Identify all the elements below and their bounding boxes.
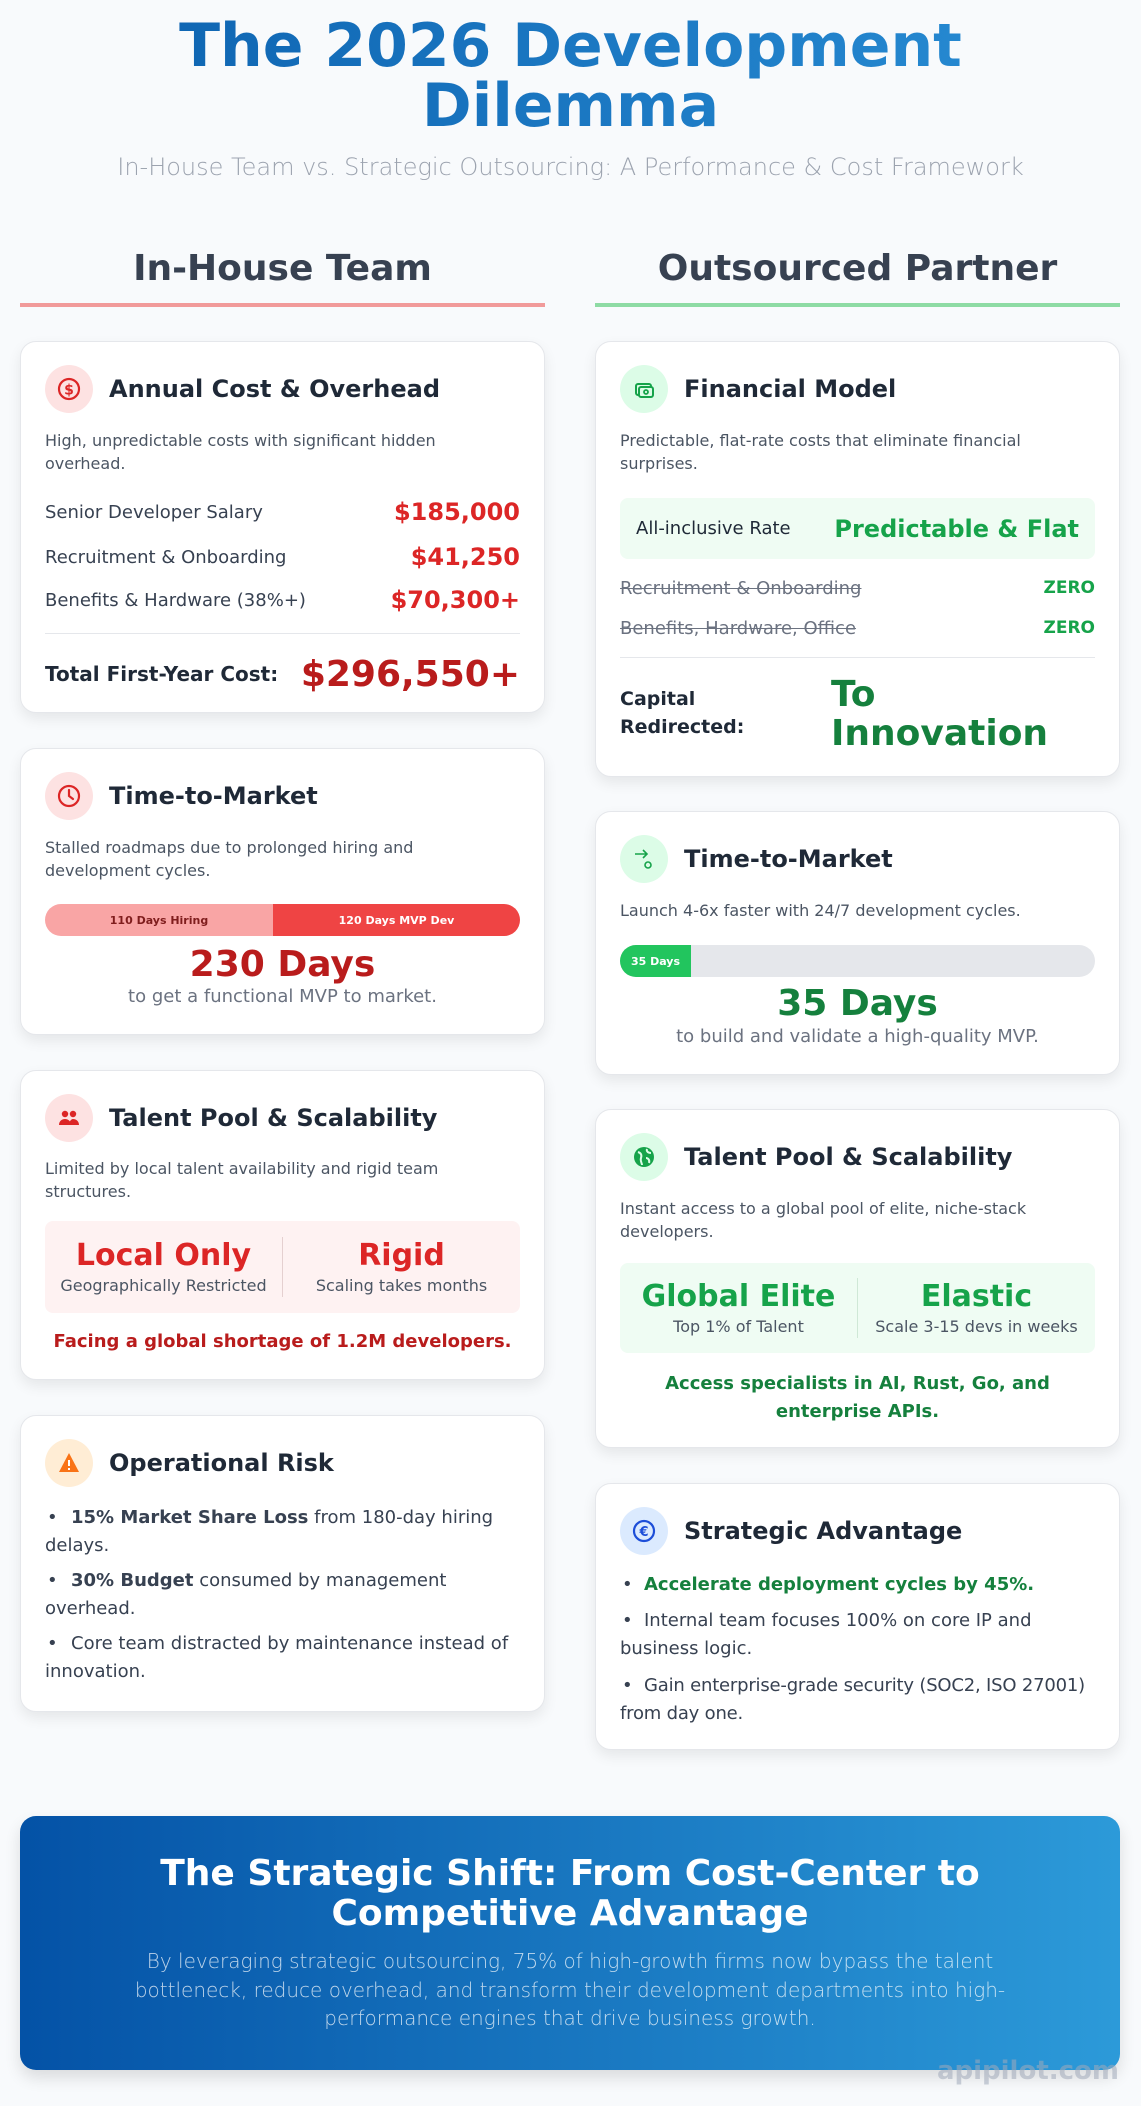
bullet list: 30% Budget consumed by management overhead. <box>45 1570 446 1619</box>
capital label: Redirected: <box>620 716 744 738</box>
bullet list: 15% Market Share Loss from 180-day hiring delays. <box>45 1507 493 1556</box>
stat box: Scaling takes months <box>316 1276 487 1295</box>
bullet list: Internal team focuses 100% on core IP and business logic. <box>620 1610 1032 1659</box>
callout: Access specialists in AI, Rust, Go, and enterprise APIs. <box>665 1373 1050 1422</box>
cost row benefits <box>45 586 520 614</box>
heading: Time-to-Market <box>684 845 893 873</box>
progress bar: 35 Days <box>631 954 680 968</box>
panel: in-house talent <box>20 1070 545 1380</box>
capital value: To <box>831 674 876 715</box>
cost row recruitment: $41,250 <box>411 543 520 571</box>
cost row recruitment <box>45 543 520 571</box>
rate box: All-inclusive Rate <box>636 518 791 539</box>
description: Launch 4-6x faster with 24/7 development cycles. <box>620 901 1021 920</box>
stacked bar <box>45 904 520 936</box>
bullet list: • <box>622 1675 632 1696</box>
bullet list: • <box>47 1633 58 1654</box>
big number: 230 Days <box>190 944 375 985</box>
title: Dilemma <box>422 71 719 141</box>
stacked bar: 110 Days Hiring <box>110 914 208 926</box>
zero row benefits: ZERO <box>1044 618 1095 638</box>
stat box <box>620 1263 1095 1353</box>
cost row benefits: Benefits & Hardware (38%+) <box>45 590 306 610</box>
cost row salary <box>45 498 520 526</box>
bullet list: • <box>47 1507 58 1528</box>
icon: warning <box>45 1439 93 1487</box>
big number: 35 Days <box>777 983 938 1024</box>
panel: outsourced talent <box>595 1109 1120 1448</box>
column header: outsourced: Outsourced Partner <box>658 248 1057 289</box>
description: Instant access to a global pool of elite, niche-stack developers. <box>620 1199 1026 1241</box>
stat box <box>45 1221 520 1313</box>
rate box <box>620 498 1095 559</box>
progress bar <box>620 945 1095 977</box>
description: Predictable, flat-rate costs that eliminate financial surprises. <box>620 431 1021 473</box>
panel: outsourced time to market <box>595 811 1120 1075</box>
stat box: Global Elite <box>642 1279 835 1314</box>
subtitle: In-House Team vs. Strategic Outsourcing: A Performance & Cost Framework <box>117 153 1024 181</box>
stat box: Geographically Restricted <box>60 1276 267 1295</box>
icon: euro <box>620 1507 668 1555</box>
bullet list: • <box>47 1570 58 1591</box>
callout: Facing a global shortage of 1.2M developers. <box>54 1331 512 1352</box>
stat box: Local Only <box>76 1238 251 1273</box>
icon: dollar: $ <box>64 382 74 398</box>
icon: people <box>45 1094 93 1142</box>
capital label: Capital <box>620 688 695 710</box>
heading: Talent Pool & Scalability <box>109 1104 437 1132</box>
panel: operational risk <box>20 1415 545 1712</box>
icon: globe <box>620 1133 668 1181</box>
bullet list: Gain enterprise-grade security (SOC2, ISO 27001) from day one. <box>620 1675 1085 1724</box>
icon: money <box>620 365 668 413</box>
column header: in-house <box>20 245 545 307</box>
bullet list: Accelerate deployment cycles by 45%. <box>644 1574 1034 1595</box>
title: The 2026 Development <box>179 11 962 81</box>
title <box>0 16 1141 136</box>
cost row benefits: $70,300+ <box>391 586 520 614</box>
stat box: Top 1% of Talent <box>673 1317 804 1336</box>
capital value: Innovation <box>831 713 1048 754</box>
rate box: Predictable & Flat <box>834 514 1079 542</box>
zero row recruitment <box>620 578 1095 598</box>
description: Limited by local talent availability and rigid team structures. <box>45 1159 438 1201</box>
capital value <box>831 674 1048 754</box>
cost row salary: $185,000 <box>394 498 520 526</box>
icon: arrow <box>620 835 668 883</box>
column header: outsourced <box>595 245 1120 307</box>
panel: annual cost <box>20 341 545 713</box>
heading: Financial Model <box>684 375 896 403</box>
icon: clock <box>45 772 93 820</box>
bullet list: • <box>622 1574 633 1595</box>
total cost <box>45 654 520 694</box>
banner text: By leveraging strategic outsourcing, 75% of high-growth firms now bypass the talent bottleneck, reduce overhead, and transform their development departments into high-performance engines that drive business growth. <box>135 1949 1005 2030</box>
panel: financial model <box>595 341 1120 777</box>
bullet list <box>45 1507 509 1682</box>
icon: dollar <box>45 365 93 413</box>
total cost: Total First-Year Cost: <box>45 662 278 686</box>
cost row salary: Senior Developer Salary <box>45 502 263 522</box>
banner heading: The Strategic Shift: From Cost-Center to Competitive Advantage <box>160 1853 980 1934</box>
description: High, unpredictable costs with significant hidden overhead. <box>45 431 436 473</box>
sub text: to get a functional MVP to market. <box>128 986 437 1007</box>
zero row benefits <box>620 618 1095 638</box>
watermark: apipilot.com <box>937 2056 1119 2086</box>
stat box: Rigid <box>358 1238 445 1273</box>
capital label <box>620 688 744 738</box>
zero row recruitment: ZERO <box>1044 578 1095 598</box>
stacked bar: 120 Days MVP Dev <box>339 914 454 926</box>
sub text: to build and validate a high-quality MVP. <box>676 1026 1039 1047</box>
panel: strategic advantage <box>595 1483 1120 1750</box>
zero row benefits: Benefits, Hardware, Office <box>620 618 856 638</box>
heading: Time-to-Market <box>109 782 318 810</box>
heading: Annual Cost & Overhead <box>109 375 440 403</box>
column header: in-house: In-House Team <box>133 248 432 289</box>
bullet list <box>620 1574 1085 1724</box>
stat box: Scale 3-15 devs in weeks <box>875 1317 1078 1336</box>
bullet list: Core team distracted by maintenance instead of innovation. <box>45 1633 508 1682</box>
stat box: Elastic <box>921 1279 1032 1314</box>
zero row recruitment: Recruitment & Onboarding <box>620 578 861 598</box>
bullet list: • <box>622 1610 633 1631</box>
heading: Talent Pool & Scalability <box>684 1143 1012 1171</box>
icon: euro: € <box>638 1525 649 1540</box>
heading: Strategic Advantage <box>684 1517 962 1545</box>
banner: strategic shift <box>20 1816 1120 2070</box>
cost row recruitment: Recruitment & Onboarding <box>45 546 286 568</box>
total cost: $296,550+ <box>301 654 520 694</box>
heading: Operational Risk <box>109 1449 334 1477</box>
panel: in-house time to market <box>20 748 545 1035</box>
description: Stalled roadmaps due to prolonged hiring and development cycles. <box>45 838 413 880</box>
